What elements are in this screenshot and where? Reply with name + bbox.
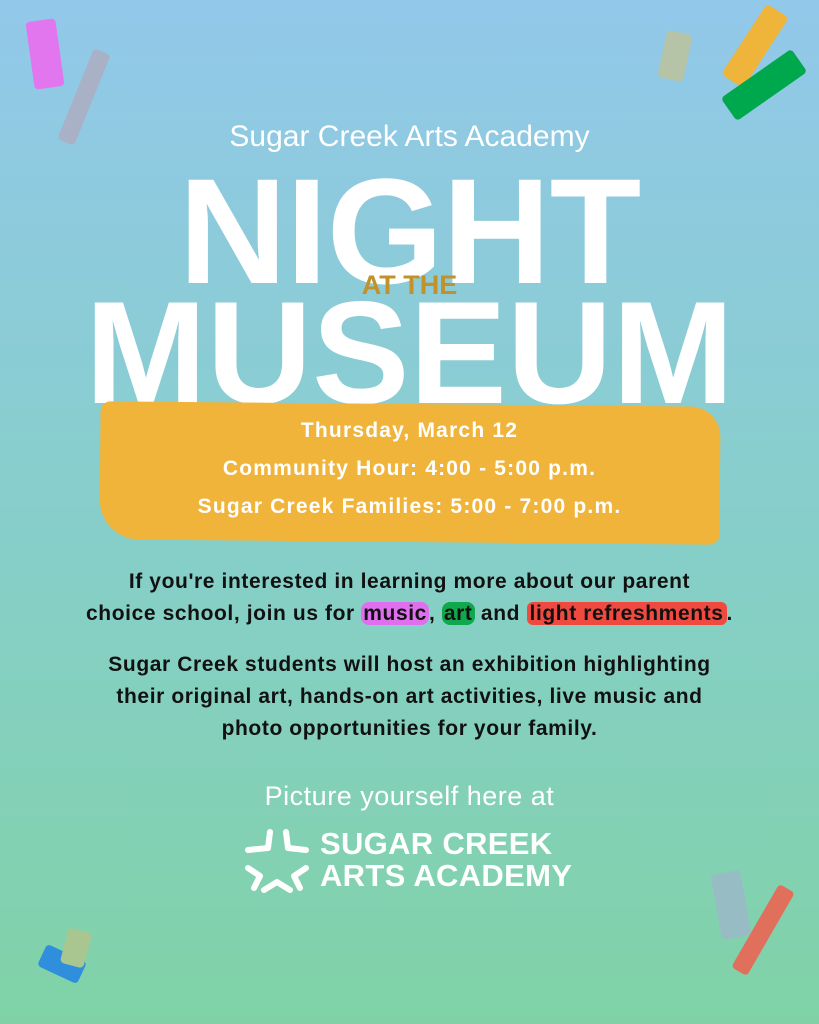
icon: star bbox=[245, 829, 309, 893]
brush stroke: grey right bbox=[710, 870, 752, 940]
title: NIGHT: NIGHT bbox=[179, 147, 640, 315]
event details: Thursday, March 12 bbox=[301, 419, 518, 442]
brush stroke: pink bbox=[25, 18, 65, 90]
tagline: Picture yourself here at bbox=[265, 781, 554, 811]
brush stroke: orange bbox=[721, 4, 789, 88]
brush stroke: grey bbox=[57, 48, 111, 146]
paragraph 1 bbox=[86, 570, 733, 625]
brush stroke: red right bbox=[731, 884, 795, 976]
subtitle: Sugar Creek Arts Academy bbox=[229, 120, 590, 153]
logo bbox=[245, 826, 572, 893]
paragraph 1: choice school, join us for music, art and light refreshments. bbox=[86, 602, 733, 625]
brush stroke: khaki bbox=[657, 30, 693, 82]
title: AT THE: AT THE bbox=[362, 270, 457, 300]
brush stroke: olive bbox=[60, 928, 92, 968]
title: MUSEUM: MUSEUM bbox=[85, 271, 734, 434]
paragraph 2: their original art, hands-on art activities, live music and bbox=[116, 685, 703, 708]
event details bbox=[198, 419, 621, 518]
paragraph 2: photo opportunities for your family. bbox=[222, 717, 597, 740]
paragraph 1: If you're interested in learning more about our parent bbox=[129, 570, 690, 593]
brush stroke: blue bbox=[37, 944, 87, 984]
logo text: SUGAR CREEK bbox=[320, 826, 552, 861]
logo text bbox=[320, 826, 572, 893]
paragraph 2 bbox=[108, 653, 711, 740]
logo text: ARTS ACADEMY bbox=[320, 858, 572, 893]
brush stroke: green bbox=[721, 49, 807, 121]
event details: Sugar Creek Families: 5:00 - 7:00 p.m. bbox=[198, 495, 621, 518]
event details: Community Hour: 4:00 - 5:00 p.m. bbox=[223, 457, 596, 480]
orange brush banner bbox=[99, 401, 721, 545]
paragraph 2: Sugar Creek students will host an exhibition highlighting bbox=[108, 653, 711, 676]
